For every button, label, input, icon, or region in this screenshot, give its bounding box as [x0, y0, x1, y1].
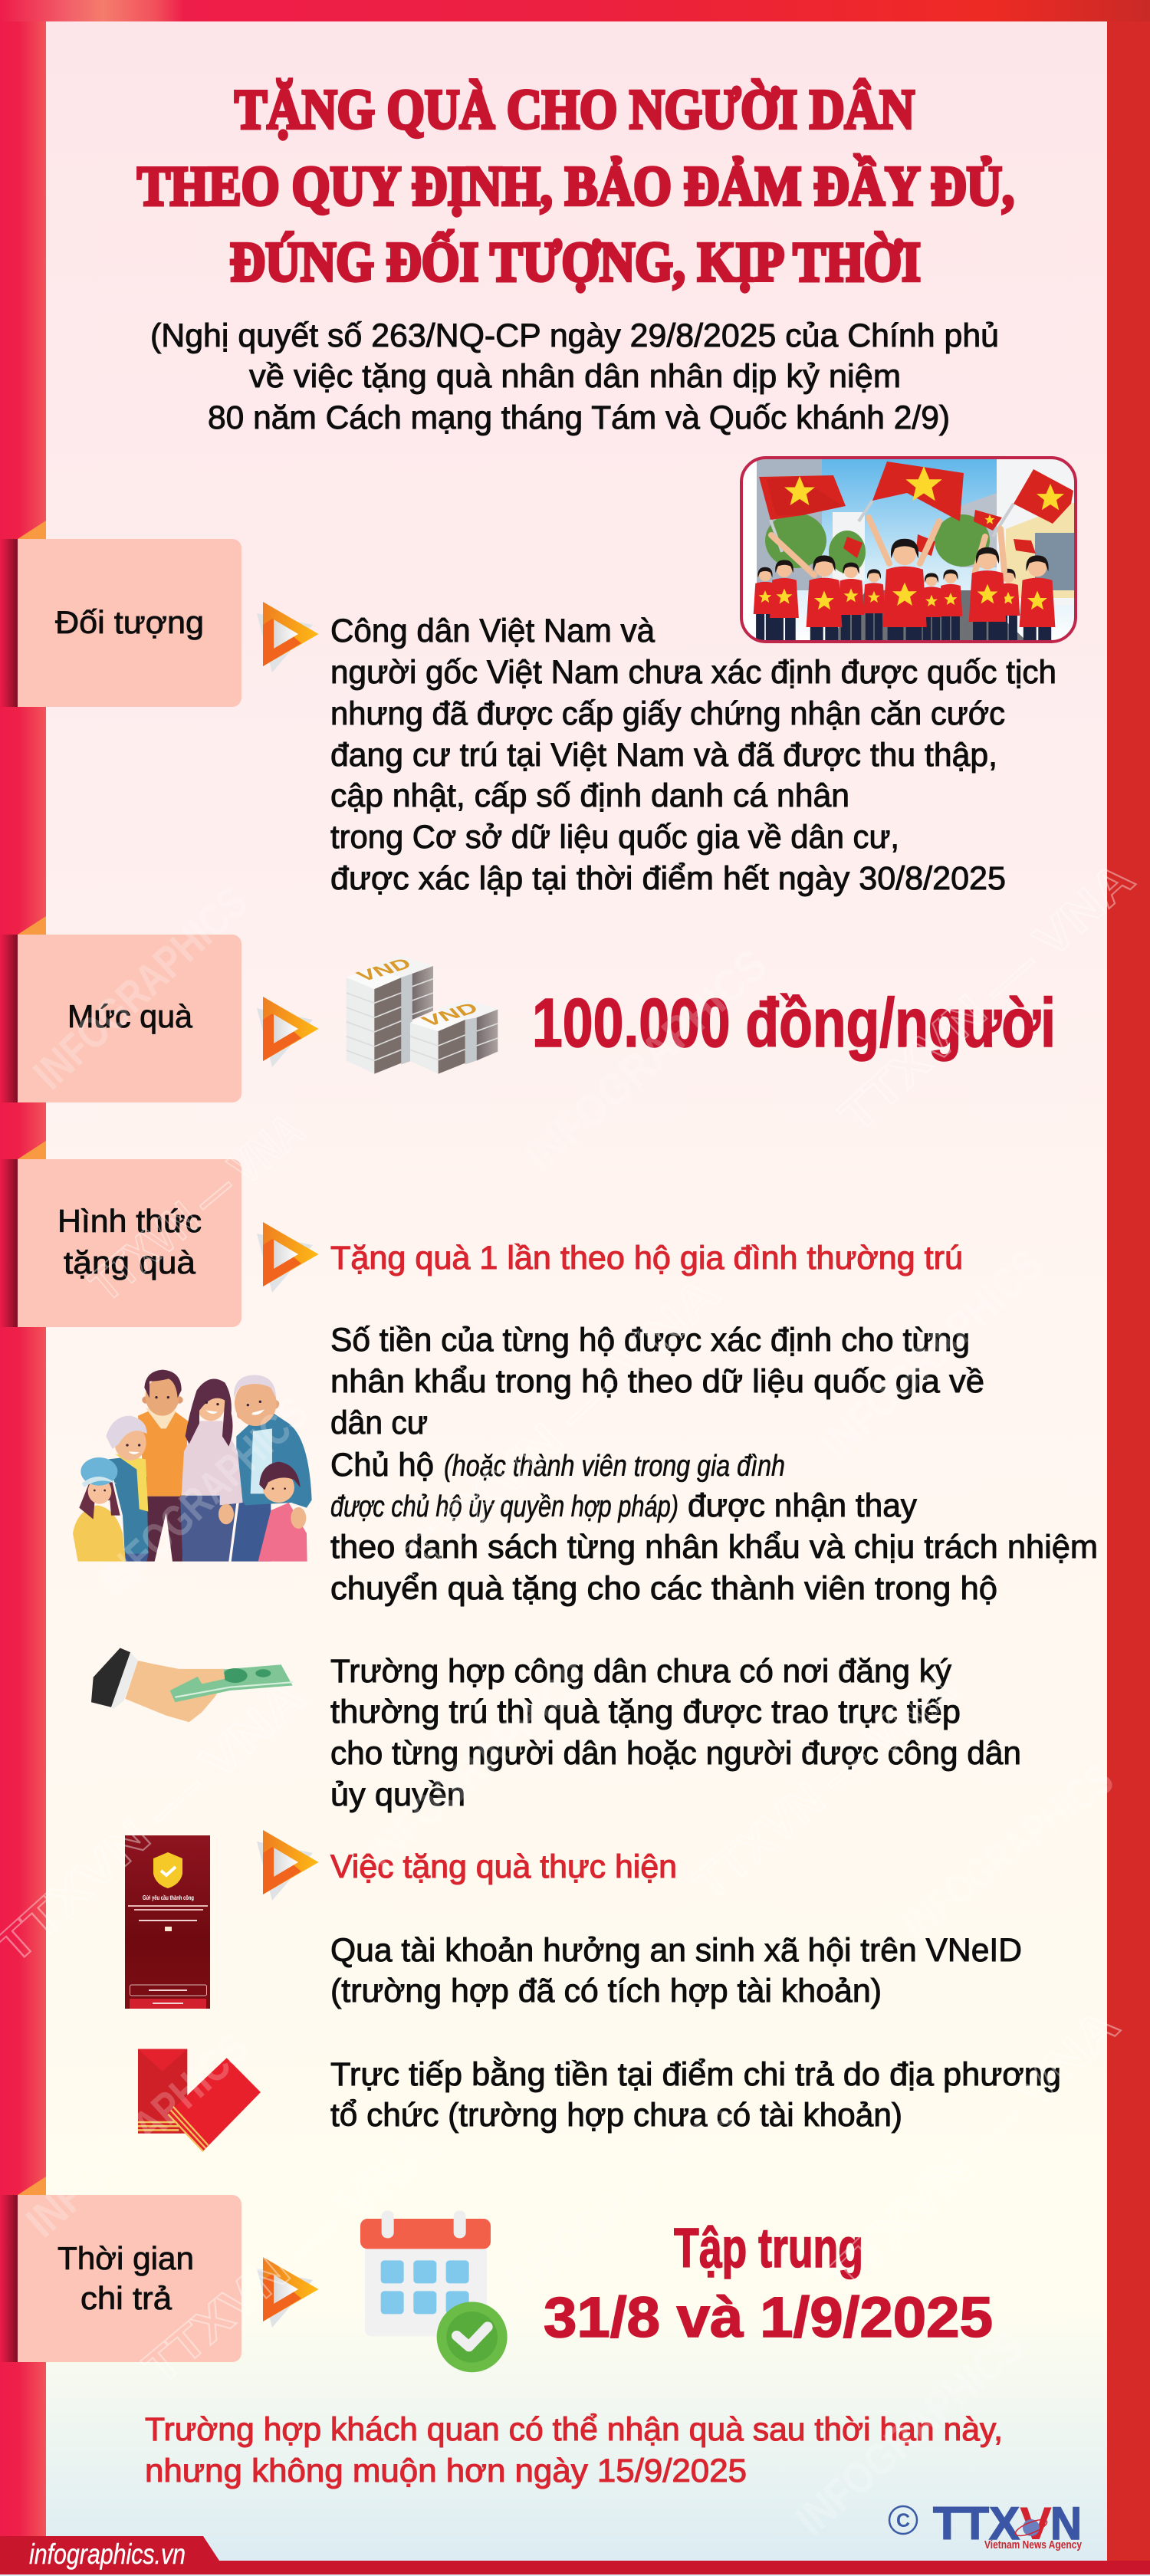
text: doi tuong description: trong Cơ sở dữ liệu quốc gia về dân cư,	[330, 819, 899, 856]
logo: copyright TTXVN: Vietnam News Agency	[984, 2538, 1083, 2551]
text: no permanent residence: thường trú thì quà tặng được trao trực tiếp	[330, 1694, 961, 1730]
logo: copyright TTXVN: N	[1050, 2498, 1082, 2549]
footer banner: infographics.vn: infographics.vn	[29, 2538, 186, 2570]
text: no permanent residence: ủy quyền	[330, 1776, 465, 1813]
text: doi tuong description: người gốc Việt Nam chưa xác định được quốc tịch	[330, 654, 1056, 691]
note: late receipt: Trường hợp khách quan có thể nhận quà sau thời hạn này,	[145, 2411, 1003, 2448]
text: direct cash: tổ chức (trường hợp chưa có tài khoản)	[330, 2097, 902, 2134]
text: household amount rule	[330, 1322, 1098, 1607]
title	[137, 78, 1014, 293]
title: THEO QUY ĐỊNH, BẢO ĐẢM ĐẦY ĐỦ,	[137, 154, 1014, 217]
text: household amount rule: theo danh sách từng nhân khẩu và chịu trách nhiệm	[330, 1529, 1098, 1566]
date: tap trung: 31/8 và 1/9/2025	[544, 2285, 993, 2349]
logo: copyright TTXVN: C	[896, 2510, 910, 2532]
subtitle	[150, 317, 999, 436]
panel: muc qua label	[0, 916, 242, 1102]
text: household amount rule: (hoặc thành viên trong gia đình	[444, 1450, 785, 1483]
watermarks: TTXVN — VNA	[134, 2121, 447, 2395]
panel: doi tuong label	[0, 521, 242, 707]
illustration frame	[741, 458, 1076, 642]
text: via VNeID: (trường hợp đã có tích hợp tài khoản)	[330, 1973, 882, 2009]
text: household amount rule: Số tiền của từng hộ được xác định cho từng	[330, 1322, 970, 1359]
note: late receipt: nhưng không muộn hơn ngày 15/9/2025	[145, 2453, 747, 2489]
watermarks: INFOGRAPHICS	[497, 2097, 745, 2306]
text: via VNeID: Qua tài khoản hưởng an sinh xã hội trên VNeID	[330, 1932, 1022, 1969]
text: household amount rule: nhân khẩu trong hộ theo dữ liệu quốc gia về	[330, 1363, 984, 1400]
watermarks: TTXVN — VNA	[814, 1999, 1129, 2306]
watermarks: INFOGRAPHICS	[515, 940, 777, 1182]
arrow: doi tuong	[257, 602, 319, 672]
subheading: viec tang qua thuc hien: Việc tặng quà thực hiện	[330, 1848, 677, 1885]
text: no permanent residence	[330, 1653, 1021, 1813]
logo: copyright TTXVN	[889, 2498, 1083, 2551]
watermarks: TTXVN — VNA	[80, 1103, 314, 1312]
watermarks: INFOGRAPHICS	[811, 1240, 1052, 1470]
text: doi tuong description: nhưng đã được cấp giấy chứng nhận căn cước	[330, 695, 1005, 732]
arrow: thoi gian	[257, 2257, 319, 2328]
date: tap trung	[544, 2218, 993, 2349]
text: household amount rule: được nhận thay	[688, 1487, 917, 1524]
text: doi tuong description: cập nhật, cấp số định danh cá nhân	[330, 777, 849, 814]
icon: VND money stacks: VND	[417, 999, 482, 1030]
watermarks: TTXVN — VNA	[685, 1663, 965, 1911]
text: doi tuong description: đang cư trú tại Việt Nam và đã được thu thập,	[330, 737, 997, 774]
logo: copyright TTXVN: TTX	[933, 2498, 1020, 2549]
text: direct cash: Trực tiếp bằng tiền tại điểm chi trả do địa phương	[330, 2056, 1061, 2093]
subheading: tang qua 1 lan: Tặng quà 1 lần theo hộ gia đình thường trú	[330, 1240, 963, 1276]
text: no permanent residence: Trường hợp công dân chưa có nơi đăng ký	[330, 1653, 951, 1690]
illustration: crowd waving Vietnamese flags	[743, 459, 1074, 640]
panel: thoi gian chi tra label: Thời gian	[58, 2240, 194, 2276]
icon: calendar with check	[360, 2210, 508, 2372]
watermarks: INFOGRAPHICS	[17, 2022, 258, 2247]
panel: thoi gian chi tra label	[0, 2177, 242, 2362]
watermarks: INFOGRAPHICS	[356, 1651, 601, 1878]
text: household amount rule: chuyển quà tặng cho các thành viên trong hộ	[330, 1570, 997, 1607]
icon: VNeID phone screen	[125, 1835, 210, 2009]
watermarks: INFOGRAPHICS	[25, 877, 257, 1099]
watermarks: TTXVN — VNA	[396, 1267, 730, 1582]
icon: hand holding cash	[91, 1648, 293, 1722]
panel: hinh thuc tang qua label	[0, 1141, 242, 1327]
logo: copyright TTXVN: V	[1020, 2498, 1052, 2549]
text: household amount rule: Chủ hộ	[330, 1447, 434, 1484]
text: household amount rule: dân cư	[330, 1405, 428, 1441]
subtitle: về việc tặng quà nhân dân nhân dịp kỷ niệm	[249, 358, 901, 395]
text: doi tuong description: Công dân Việt Nam và	[330, 613, 655, 649]
illustration: family	[73, 1370, 312, 1562]
subtitle: 80 năm Cách mạng tháng Tám và Quốc khánh 2/9)	[208, 399, 950, 436]
icon: VND money stacks: VND	[352, 955, 416, 985]
date: tap trung: Tập trung	[674, 2218, 863, 2279]
text: doi tuong description: được xác lập tại thời điểm hết ngày 30/8/2025	[330, 860, 1006, 897]
icon: red envelopes	[138, 2049, 261, 2151]
subtitle: (Nghị quyết số 263/NQ-CP ngày 29/8/2025 của Chính phủ	[150, 317, 999, 354]
text: doi tuong description	[330, 613, 1056, 897]
text: direct cash	[330, 2056, 1061, 2134]
watermarks: INFOGRAPHICS	[90, 1388, 317, 1605]
title: TẶNG QUÀ CHO NGƯỜI DÂN	[235, 78, 915, 140]
panel: hinh thuc tang qua label: tặng quà	[64, 1244, 196, 1280]
watermarks: INFOGRAPHICS	[787, 2321, 1033, 2545]
panel: thoi gian chi tra label: chi trả	[80, 2280, 172, 2316]
arrow: muc qua	[257, 997, 319, 1067]
watermarks	[0, 852, 1145, 2545]
note: late receipt	[145, 2411, 1003, 2489]
watermarks: TTXVN — VNA	[830, 852, 1145, 1142]
text: household amount rule: được chủ hộ ủy quyền hợp pháp)	[330, 1490, 678, 1523]
arrow: hinh thuc	[257, 1222, 319, 1293]
text: no permanent residence: cho từng người dân hoặc người được công dân	[330, 1735, 1021, 1772]
title: ĐÚNG ĐỐI TƯỢNG, KỊP THỜI	[230, 229, 921, 293]
panel: muc qua label: Mức quà	[67, 998, 193, 1034]
arrow: viec tang qua	[257, 1830, 319, 1901]
icon: VND money stacks	[347, 955, 498, 1074]
icon: VNeID phone screen: Gửi yêu cầu thành công	[143, 1894, 194, 1901]
text: via VNeID	[330, 1932, 1022, 2009]
panel: hinh thuc tang qua label: Hình thức	[58, 1203, 202, 1239]
panel: doi tuong label: Đối tượng	[55, 604, 204, 640]
